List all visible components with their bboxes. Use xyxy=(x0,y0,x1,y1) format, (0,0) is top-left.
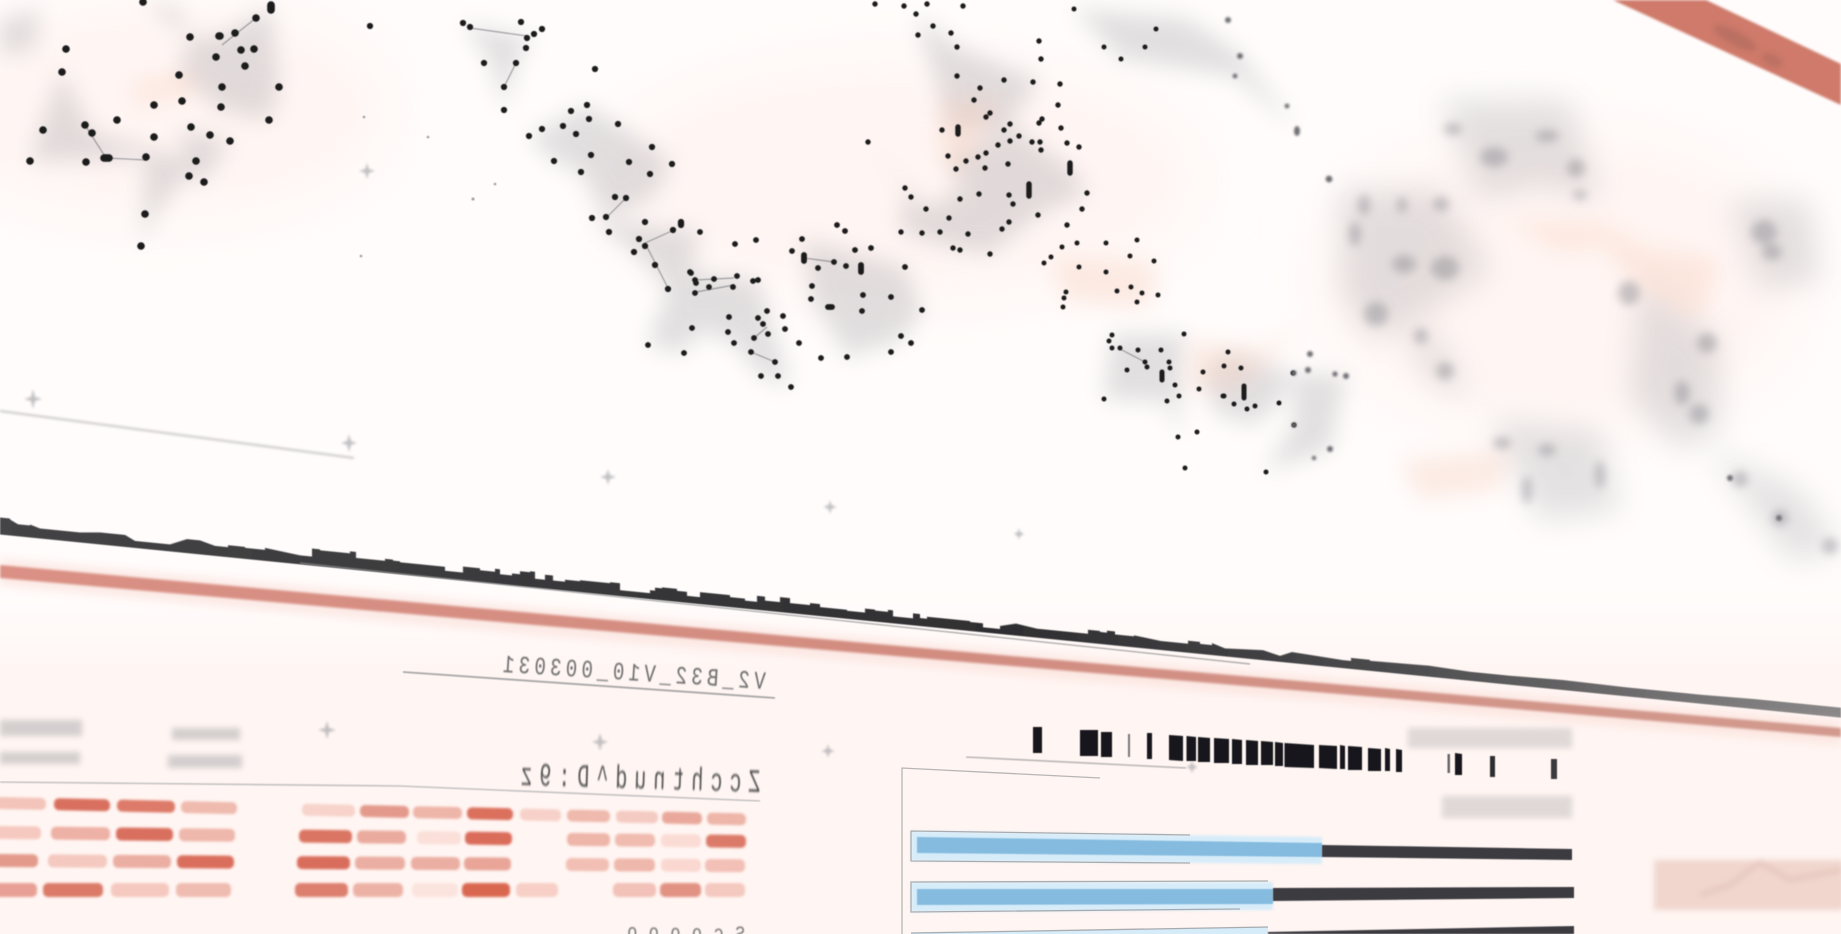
label: sequence id xyxy=(403,652,775,698)
network edges xyxy=(85,18,1145,362)
bar 1 xyxy=(911,831,1572,864)
heatmap row 4 xyxy=(0,883,745,897)
network haze: warm tint xyxy=(130,70,1720,500)
axis line, upper left xyxy=(0,411,354,458)
barcode track xyxy=(1033,727,1557,779)
spectrum track xyxy=(0,516,1841,745)
nodes: centre loop xyxy=(648,225,922,387)
red band, top right xyxy=(1613,0,1841,105)
red line xyxy=(0,565,1841,737)
bar 2 xyxy=(911,881,1574,912)
network haze: far right defocused fills xyxy=(1340,100,1841,560)
heatmap row 3 xyxy=(0,854,745,872)
blurred labels, left xyxy=(0,720,242,768)
bars panel xyxy=(902,768,1574,934)
red line halo xyxy=(0,558,1841,745)
heatmap row 1 xyxy=(0,797,746,825)
nodes: left cluster xyxy=(30,2,279,246)
barcode axis line xyxy=(966,757,1186,768)
heatmap xyxy=(0,797,746,897)
pale red chart box, bottom right xyxy=(1654,860,1841,910)
network nodes: sharp left and centre clusters xyxy=(30,2,1294,472)
network haze: soft cluster fills xyxy=(0,2,1346,471)
nodes: right fragments xyxy=(1044,9,1294,472)
network nodes: out-of-focus right side xyxy=(1225,17,1782,521)
small grey specks xyxy=(360,116,496,257)
label: sequence id: V2_B32_V10_003031 xyxy=(502,652,766,697)
heatmap row 2 xyxy=(0,826,746,848)
panel outline xyxy=(902,768,1100,934)
plus-shaped registration marks xyxy=(24,163,1198,773)
bar 3 xyxy=(911,926,1574,934)
histogram strip xyxy=(0,516,1841,718)
network smudges: far right defocused cluster xyxy=(1349,123,1838,554)
heading: heatmap xyxy=(0,760,761,803)
heading: heatmap: Zcchtnud^D:9z xyxy=(520,760,761,803)
nodes: upper chain xyxy=(370,22,681,289)
blurred labels, right of barcode xyxy=(1408,728,1572,818)
thin rule under strip xyxy=(300,563,1250,664)
nodes: top centre xyxy=(868,4,1087,254)
